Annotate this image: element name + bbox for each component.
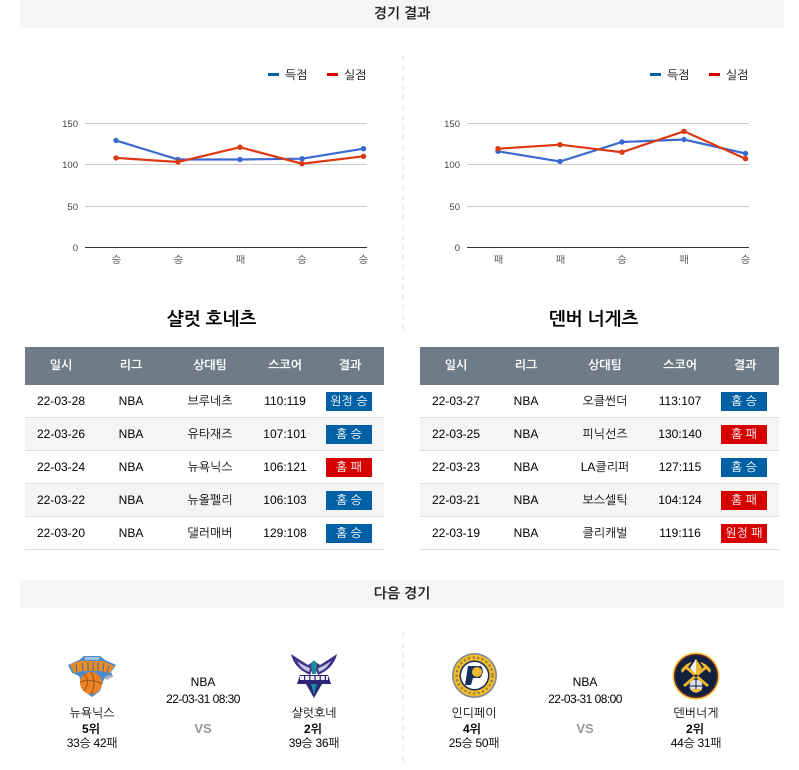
table: Denver recent games: 119:116 (659, 526, 701, 540)
heading: game results (20, 0, 784, 28)
table: Charlotte recent games: 22-03-20 (37, 526, 85, 540)
table: Charlotte recent games: 댈러매버 (187, 526, 233, 540)
table: Denver recent games: 22-03-25 (432, 427, 480, 441)
table: Denver recent games: NBA (514, 493, 538, 507)
time: Knicks vs Hornets: 22-03-31 08:30 (166, 692, 240, 706)
line chart: Denver Nuggets: 150 (444, 119, 460, 130)
table: Charlotte recent games: 홈 승 (336, 427, 362, 441)
league: Pacers vs Nuggets: NBA (573, 675, 597, 689)
line chart: Denver Nuggets (444, 68, 751, 266)
line chart: Denver Nuggets: 패 (494, 254, 503, 266)
rank: Pacers: 4위 (463, 722, 481, 736)
line chart: Charlotte Hornets: 득점 (285, 68, 308, 82)
table: Denver recent games: 127:115 (659, 460, 701, 474)
table: Charlotte recent games: 리그 (120, 358, 142, 372)
heading: Denver Nuggets: 덴버 너게츠 (549, 309, 638, 329)
table: Denver recent games: NBA (514, 394, 538, 408)
line chart: Charlotte Hornets (62, 68, 369, 266)
table: Charlotte recent games: 22-03-22 (37, 493, 85, 507)
versus: VS (576, 721, 594, 736)
heading: Charlotte Hornets: 샬럿 호네츠 (167, 309, 256, 329)
table: Denver recent games: NBA (514, 460, 538, 474)
line chart: Denver Nuggets: 100 (444, 160, 460, 171)
table: Denver recent games: 홈 패 (731, 493, 757, 507)
icon: Pacers logo (452, 653, 497, 698)
table: Charlotte recent games: NBA (119, 460, 143, 474)
rank: Nuggets: 2위 (686, 722, 704, 736)
table: Charlotte recent games: NBA (119, 493, 143, 507)
table: Charlotte recent games: 스코어 (268, 358, 302, 372)
line chart: Denver Nuggets: 패 (556, 254, 565, 266)
table: Denver recent games: 홈 승 (731, 394, 757, 408)
table: Charlotte recent games: 홈 패 (336, 460, 362, 474)
icon: Hornets logo (291, 654, 337, 698)
icon: Knicks logo (68, 656, 116, 697)
table: Denver recent games: 원정 패 (725, 526, 763, 540)
rank: Hornets: 2위 (304, 722, 322, 736)
line chart: Charlotte Hornets: 패 (236, 254, 245, 266)
table: Charlotte recent games: 22-03-24 (37, 460, 85, 474)
table: Charlotte recent games: 원정 승 (330, 394, 368, 408)
record: Pacers: 25승 50패 (449, 736, 499, 750)
table: Charlotte recent games: NBA (119, 394, 143, 408)
line chart: Denver Nuggets: 승 (617, 254, 627, 266)
versus: VS (194, 721, 212, 736)
table: Denver recent games: 홈 패 (731, 427, 757, 441)
time: Pacers vs Nuggets: 22-03-31 08:00 (548, 692, 622, 706)
table: Denver recent games: 상대팀 (588, 358, 622, 372)
table: Charlotte recent games: 22-03-28 (37, 394, 85, 408)
team: Hornets: 샬럿호네 (291, 706, 337, 720)
heading: game results: 경기 결과 (374, 5, 430, 21)
table: Charlotte recent games: 106:121 (263, 460, 307, 474)
rank: Knicks: 5위 (82, 722, 100, 736)
table: Denver recent games: 130:140 (658, 427, 702, 441)
table: Denver recent games: 클리캐벌 (582, 526, 628, 540)
table: Denver recent games: 104:124 (658, 493, 702, 507)
table: Charlotte recent games: 107:101 (263, 427, 307, 441)
table: Denver recent games: NBA (514, 526, 538, 540)
table: Charlotte recent games: 129:108 (263, 526, 307, 540)
table: Charlotte recent games: 일시 (50, 358, 72, 372)
team: Nuggets: 덴버너게 (673, 706, 719, 720)
table: Charlotte recent games: 22-03-26 (37, 427, 85, 441)
line chart: Charlotte Hornets: 실점 (344, 68, 367, 82)
table: Denver recent games: 22-03-27 (432, 394, 480, 408)
table: Charlotte recent games: 홈 승 (336, 526, 362, 540)
icon: Nuggets logo (672, 652, 720, 700)
table: Charlotte recent games: 결과 (339, 358, 361, 372)
table: Charlotte recent games: 106:103 (263, 493, 307, 507)
line chart: Denver Nuggets: 패 (679, 254, 689, 266)
table: Denver recent games: NBA (514, 427, 538, 441)
table: Charlotte recent games: NBA (119, 526, 143, 540)
team: Pacers: 인디페이 (451, 706, 497, 720)
table: Charlotte recent games (25, 347, 384, 550)
line chart: Charlotte Hornets: 승 (112, 254, 122, 266)
league: Knicks vs Hornets: NBA (191, 675, 215, 689)
table: Denver recent games: 피닉선즈 (582, 427, 628, 441)
line chart: Denver Nuggets: 득점 (667, 68, 690, 82)
table: Denver recent games: 홈 승 (731, 460, 757, 474)
table: Charlotte recent games: 유타재즈 (187, 427, 233, 441)
table: Denver recent games: LA클리퍼 (581, 460, 629, 474)
table: Charlotte recent games: 홈 승 (336, 493, 362, 507)
table: Denver recent games: 스코어 (663, 358, 697, 372)
table: Denver recent games: 22-03-19 (432, 526, 480, 540)
record: Hornets: 39승 36패 (289, 736, 339, 750)
line chart: Denver Nuggets: 실점 (726, 68, 749, 82)
table: Charlotte recent games: NBA (119, 427, 143, 441)
table: Denver recent games: 리그 (515, 358, 537, 372)
line chart: Charlotte Hornets: 승 (359, 254, 369, 266)
line chart: Charlotte Hornets: 100 (62, 160, 78, 171)
table: Denver recent games: 22-03-21 (432, 493, 480, 507)
table: Denver recent games: 113:107 (659, 394, 701, 408)
line chart: Charlotte Hornets: 승 (297, 254, 307, 266)
table: Denver recent games: 보스셀틱 (582, 493, 628, 507)
table: Denver recent games (420, 347, 779, 550)
line chart: Denver Nuggets: 승 (741, 254, 751, 266)
team: Knicks: 뉴욕닉스 (69, 706, 115, 720)
line chart: Charlotte Hornets: 승 (174, 254, 184, 266)
table: Charlotte recent games: 상대팀 (193, 358, 227, 372)
line chart: Charlotte Hornets: 150 (62, 119, 78, 130)
table: Charlotte recent games: 뉴올펠리 (187, 493, 233, 507)
heading: next games: 다음 경기 (374, 585, 430, 601)
table: Denver recent games: 오클썬더 (582, 394, 628, 408)
table: Charlotte recent games: 110:119 (264, 394, 306, 408)
table: Charlotte recent games: 브루네츠 (187, 394, 233, 408)
table: Denver recent games: 22-03-23 (432, 460, 480, 474)
line chart: Charlotte Hornets: 50 (67, 202, 78, 213)
table: Denver recent games: 결과 (734, 358, 756, 372)
record: Knicks: 33승 42패 (67, 736, 117, 750)
line chart: Charlotte Hornets: 0 (73, 243, 78, 254)
line chart: Denver Nuggets: 50 (449, 202, 460, 213)
table: Denver recent games: 일시 (445, 358, 467, 372)
line chart: Denver Nuggets: 0 (455, 243, 460, 254)
record: Nuggets: 44승 31패 (671, 736, 721, 750)
table: Charlotte recent games: 뉴욕닉스 (187, 460, 233, 474)
heading: next games (20, 580, 784, 608)
